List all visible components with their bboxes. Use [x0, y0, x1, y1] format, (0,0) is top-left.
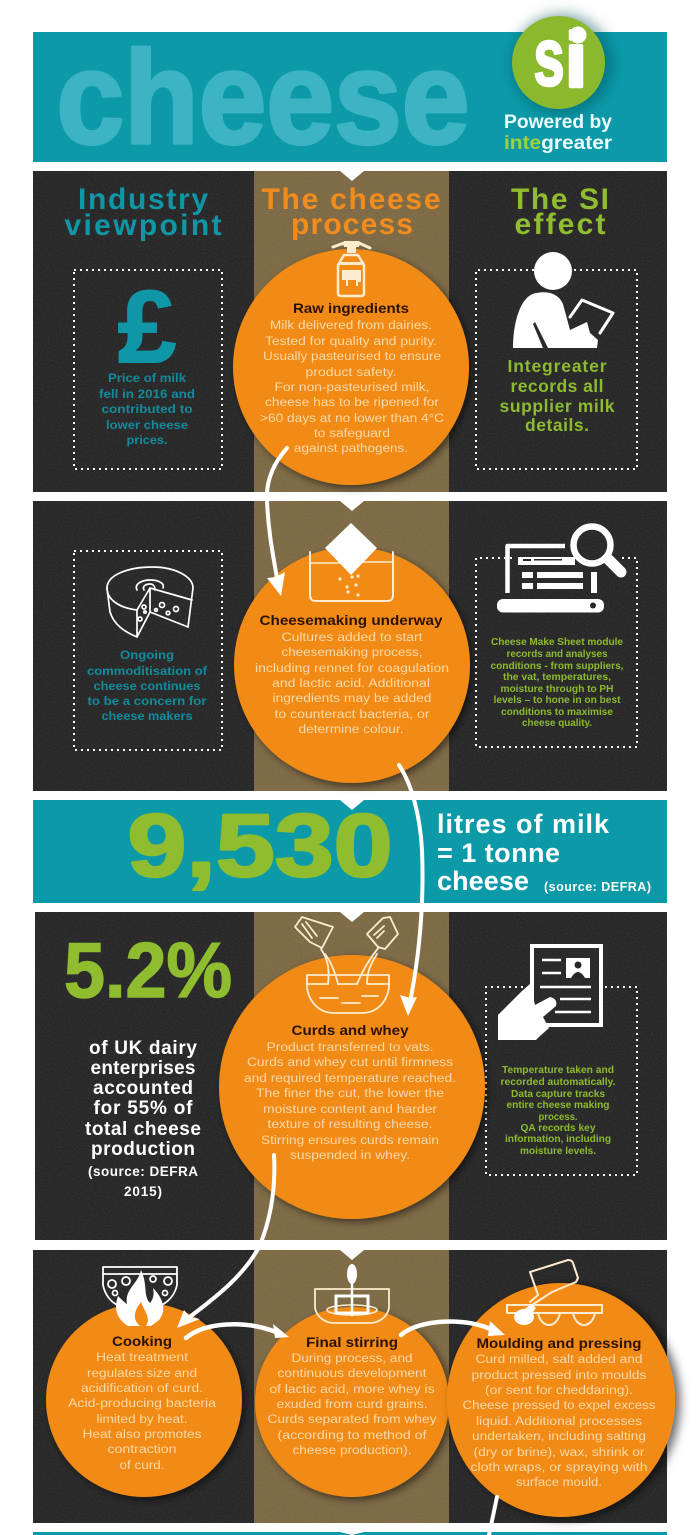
text: price of milk	[99, 373, 195, 447]
text: cheese make sheet: cheese quality.	[522, 718, 592, 729]
circle: cheesemaking underway	[234, 523, 470, 783]
text: curds description: texture of resulting cheese.	[268, 1119, 432, 1131]
text: price of milk: fell in 2016 and	[99, 389, 195, 401]
text: moulding description: Curd milled, salt added and	[476, 1354, 642, 1366]
arrow: stirring to moulding	[401, 1321, 505, 1336]
text: curds and whey: Curds and whey	[292, 1023, 409, 1038]
text: cheese make sheet: levels – to hone in on best	[494, 695, 621, 706]
text: UK dairy enterprises: 2015)	[124, 1184, 162, 1199]
text: raw ingredients description: to safeguard	[314, 428, 390, 440]
heading: industry viewpoint: Industry	[78, 183, 208, 216]
text: cooking description: Heat also promotes	[82, 1429, 202, 1441]
text: raw ingredients description: Milk delivered from dairies.	[270, 320, 432, 332]
text: cooking description: regulates size and	[87, 1368, 197, 1380]
panel: row 2 cheesemaking	[33, 501, 667, 791]
text: UK dairy enterprises: accounted	[93, 1078, 193, 1099]
text: UK dairy enterprises: of UK dairy	[89, 1038, 197, 1059]
text: raw ingredients description: For non-pasteurised milk,	[274, 382, 430, 394]
text: cooking description: of curd.	[120, 1460, 164, 1472]
circle: raw ingredients	[233, 241, 469, 485]
stat: 5.2%: 5.2%	[64, 926, 232, 1014]
callout: price of milk	[74, 270, 222, 469]
panel: row 1 raw ingredients	[33, 171, 667, 492]
heading: the SI effect: effect	[514, 208, 606, 241]
circle: moulding and pressing	[447, 1260, 675, 1517]
text: moulding description: (or sent for cheddaring).	[485, 1385, 633, 1397]
text: UK dairy enterprises: for 55% of	[94, 1098, 193, 1119]
text: cheesemaking description: including rennet for coagulation	[255, 663, 449, 675]
icon: cheese wheel	[107, 567, 193, 637]
text: stirring description: continuous development	[278, 1368, 427, 1380]
text: cooking description: contraction	[108, 1444, 176, 1456]
heading: industry viewpoint	[64, 183, 222, 242]
title: cheese: cheese	[56, 24, 470, 171]
callout: cheese make sheet	[476, 526, 637, 747]
circle: final stirring	[255, 1264, 449, 1497]
text: litres of milk: litres of milk	[437, 809, 610, 839]
text: stirring description: cheese production).	[292, 1445, 412, 1457]
text: price of milk: Price of milk	[108, 373, 187, 385]
circle: curds and whey	[219, 917, 485, 1219]
text: curds description: suspended in whey.	[290, 1150, 410, 1162]
text: raw ingredients description: Tested for quality and purity.	[265, 336, 437, 348]
icon: moulds and pouring cup	[507, 1260, 602, 1325]
text: cheese make sheet: the vat, temperatures,	[503, 672, 611, 683]
text: integreater records: supplier milk	[500, 396, 615, 416]
powered by integreater: Powered by	[504, 112, 612, 133]
text: moulding description: surface mould.	[516, 1477, 602, 1489]
text: temperature: QA records key	[520, 1123, 596, 1134]
text: moulding and pressing: Moulding and pressing	[476, 1336, 642, 1351]
icon: vat with diamond	[310, 523, 393, 601]
icon: pound sign: £	[118, 270, 176, 384]
text: UK dairy enterprises: total cheese	[85, 1119, 201, 1140]
text: curds description: Product transferred to vats.	[266, 1042, 434, 1054]
icon: laptop and magnifier	[497, 526, 621, 612]
text: curds description: The finer the cut, the lower the	[256, 1088, 444, 1100]
text: stirring description: exuded from curd grains.	[276, 1399, 428, 1411]
panel: row 4 cooking, stirring, moulding	[33, 1250, 675, 1523]
text: UK dairy enterprises: enterprises	[90, 1058, 196, 1079]
text: cheesemaking description: Cultures added to start	[282, 632, 423, 644]
text: commoditisation: to be a concern for	[88, 696, 207, 708]
text: raw ingredients description	[260, 320, 444, 455]
text: cooking description: acidification of curd.	[81, 1383, 203, 1395]
circle: cooking	[46, 1267, 242, 1497]
text: temperature: entire cheese making	[506, 1100, 610, 1111]
text: litres of milk: = 1 tonne	[437, 838, 560, 868]
text: cheesemaking description: determine colour.	[298, 724, 404, 736]
text: cheesemaking description: to counteract bacteria, or	[274, 709, 430, 721]
callout: integreater records	[476, 252, 637, 469]
callout: commoditisation	[74, 551, 222, 750]
text: moulding description: undertaken, including salting	[472, 1431, 646, 1443]
text: stirring description: Curds separated from whey	[268, 1414, 437, 1426]
text: moulding description: liquid. Additional processes	[476, 1416, 642, 1428]
text: moulding description: Cheese pressed to expel excess	[462, 1400, 656, 1412]
SI logo: s	[534, 12, 564, 103]
heading: industry viewpoint: viewpoint	[64, 209, 222, 242]
heading: the SI effect	[511, 183, 609, 241]
text: cheese make sheet: conditions to maximise	[501, 707, 613, 718]
text: moulding description: cloth wraps, or spraying with	[470, 1462, 648, 1474]
text: commoditisation: cheese continues	[94, 681, 200, 693]
text: temperature: moisture levels.	[520, 1146, 596, 1157]
text: cheesemaking description: cheesemaking process,	[282, 647, 422, 659]
text: cheesemaking description	[255, 632, 449, 736]
text: cheesemaking underway: Cheesemaking underway	[260, 613, 443, 628]
text: commoditisation: commoditisation of	[87, 666, 207, 678]
text: litres of milk: (source: DEFRA)	[544, 880, 651, 894]
text: commoditisation	[87, 650, 207, 723]
text: integreater records: Integreater	[508, 356, 607, 376]
arrow: moulding onward	[489, 1497, 497, 1535]
arrow: curds to cooking	[177, 1155, 274, 1328]
header banner	[33, 12, 667, 171]
arrow: cooking to stirring	[186, 1324, 289, 1338]
text: integreater records	[500, 356, 615, 435]
text: raw ingredients description: >60 days at no lower than 4°C	[260, 413, 444, 425]
text: price of milk: prices.	[126, 435, 168, 447]
text: raw ingredients description: product safety.	[306, 367, 396, 379]
text: cooking description: Acid-producing bacteria	[68, 1398, 217, 1410]
text: cheese make sheet	[490, 637, 624, 729]
text: stirring description	[268, 1353, 437, 1457]
text: final stirring: Final stirring	[306, 1335, 398, 1350]
text: cheesemaking description: and lactic acid. Additional	[272, 678, 430, 690]
text: curds description: and required temperature reached.	[244, 1073, 456, 1085]
heading: the SI effect: The SI	[511, 183, 609, 216]
icon: hand holding document	[498, 946, 601, 1040]
text: price of milk: lower cheese	[106, 420, 188, 432]
text: temperature: recorded automatically.	[500, 1077, 616, 1088]
text: integreater records: records all	[510, 376, 604, 396]
text: UK dairy enterprises	[85, 1038, 201, 1199]
stat number: 9,530: 9,530	[128, 795, 392, 895]
text: cheese make sheet: Cheese Make Sheet module	[491, 637, 623, 648]
text: price of milk: contributed to	[102, 404, 192, 416]
heading: the cheese process: process	[291, 208, 413, 241]
icon: bowl over flame	[103, 1267, 177, 1326]
text: cheese make sheet: records and analyses	[506, 649, 608, 660]
text: raw ingredients description: Usually pasteurised to ensure	[263, 351, 441, 363]
text: commoditisation: cheese makers	[102, 711, 192, 723]
text: temperature: Temperature taken and	[502, 1065, 614, 1076]
text: moulding description: (dry or brine), wax, shrink or	[474, 1447, 645, 1459]
text: cooking description	[68, 1352, 217, 1472]
text: integreater records: details.	[525, 415, 589, 435]
text: temperature	[500, 1065, 616, 1157]
text: temperature: information, including	[505, 1134, 611, 1145]
heading: the cheese process: The cheese	[262, 183, 440, 216]
text: cooking: Cooking	[112, 1334, 172, 1349]
heading: the cheese process	[262, 183, 440, 241]
icon: stirring vat	[315, 1264, 389, 1323]
text: moulding description: product pressed into moulds	[472, 1370, 647, 1382]
text: cooking description: limited by heat.	[96, 1414, 188, 1426]
SI logo: i	[565, 18, 587, 103]
text: curds description: Stirring ensures curds remain	[261, 1135, 439, 1147]
arrow: raw ingredients to cheesemaking	[267, 448, 287, 596]
text: stirring description: During process, and	[292, 1353, 412, 1365]
SI logo	[512, 12, 612, 114]
text: curds description: moisture content and harder	[263, 1104, 437, 1116]
text: temperature: process.	[538, 1112, 578, 1123]
text: cooking description: Heat treatment	[96, 1352, 189, 1364]
text: moulding description	[462, 1354, 656, 1489]
callout: temperature	[486, 946, 637, 1175]
text: commoditisation: Ongoing	[120, 650, 174, 662]
bottom teal band	[33, 1532, 667, 1535]
text: UK dairy enterprises: (source: DEFRA	[88, 1164, 198, 1179]
powered by integreater	[504, 112, 613, 154]
text: raw ingredients description: against pathogens.	[294, 443, 408, 455]
icon: bowl and cups	[295, 917, 398, 1013]
text: stirring description: (according to method of	[278, 1430, 427, 1442]
text: litres of milk	[437, 809, 651, 896]
text: curds description: Curds and whey cut until firmness	[247, 1057, 453, 1069]
icon: milk churn	[333, 241, 370, 296]
text: cheesemaking description: ingredients may be added	[272, 693, 432, 705]
text: cheese make sheet: conditions - from suppliers,	[490, 661, 624, 672]
text: stirring description: of lactic acid, more whey is	[270, 1384, 435, 1396]
text: raw ingredients description: cheese has to be ripened for	[265, 397, 439, 409]
text: UK dairy enterprises: production	[91, 1139, 195, 1160]
stat band: 9,530 litres	[33, 795, 667, 903]
text: curds description	[244, 1042, 456, 1162]
arrow: cheesemaking to curds	[399, 765, 423, 1016]
text: litres of milk: cheese	[437, 866, 529, 896]
icon: person with tablet	[513, 252, 613, 348]
text: raw ingredients: Raw ingredients	[293, 301, 409, 316]
text: cheese make sheet: moisture through to PH	[500, 684, 614, 695]
panel: row 3 curds and whey	[35, 912, 667, 1240]
text: temperature: Data capture tracks	[511, 1089, 605, 1100]
powered by integreater: integreater	[504, 133, 613, 154]
